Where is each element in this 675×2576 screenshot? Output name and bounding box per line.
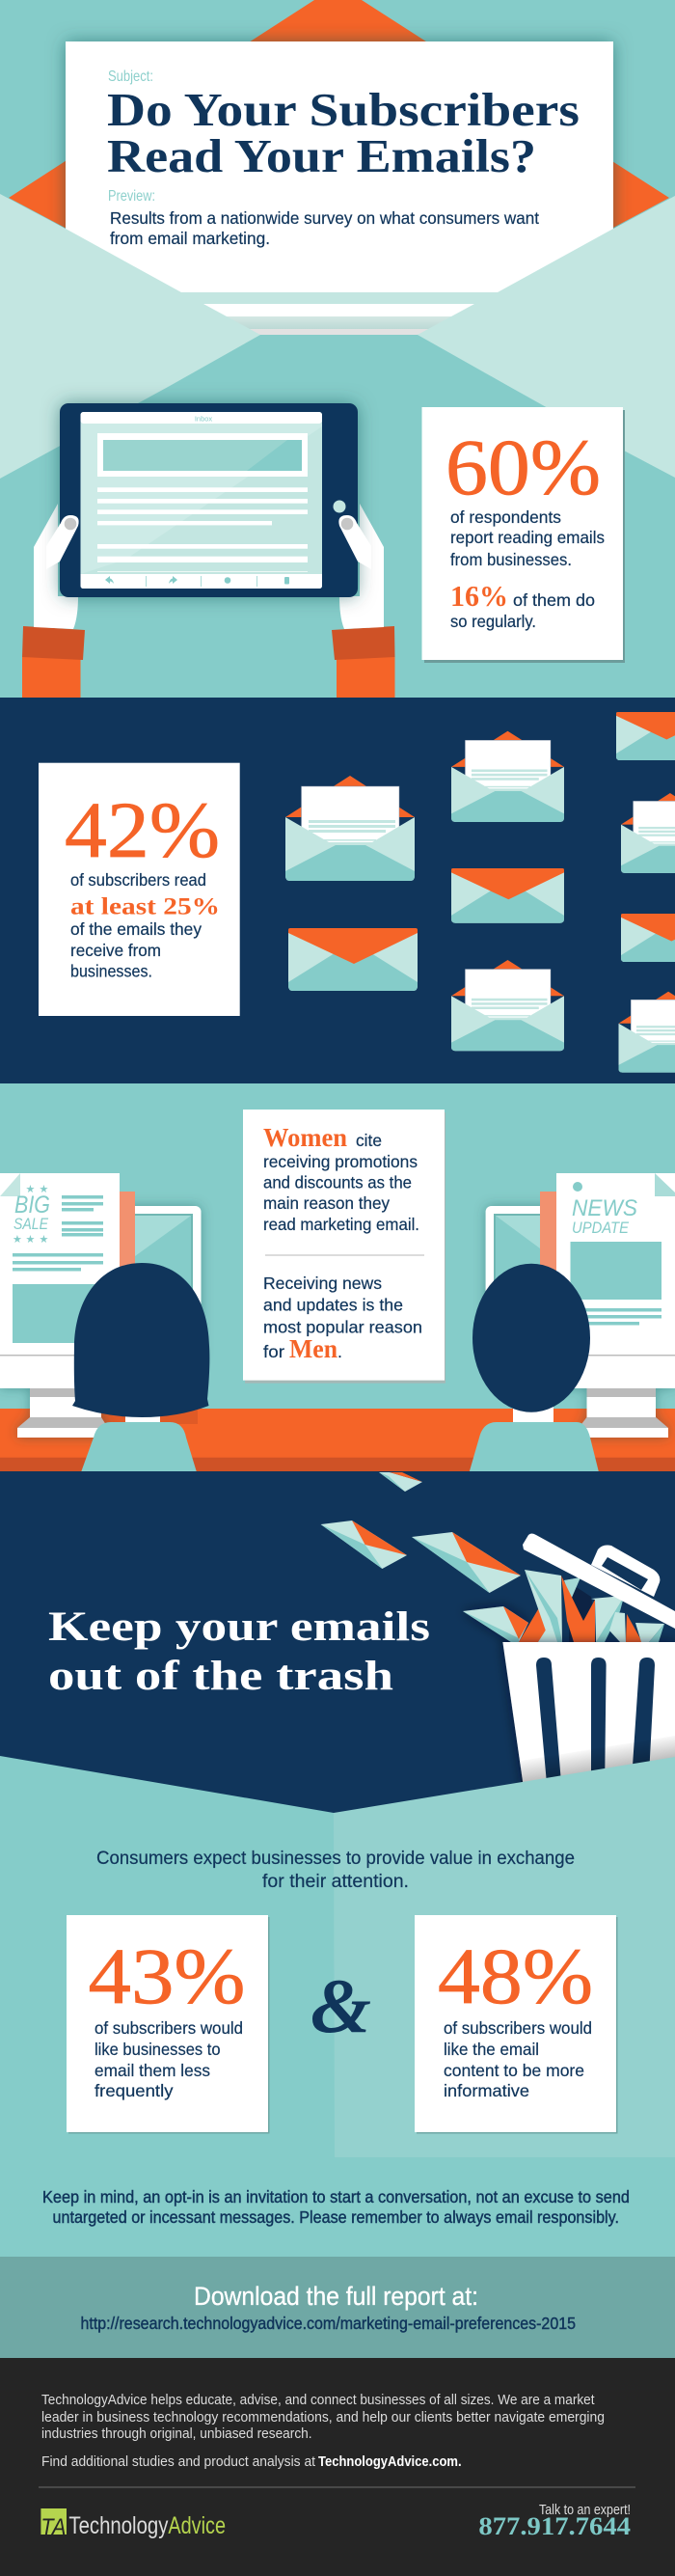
phone number: 877.917.7644 (478, 2512, 631, 2540)
tablet screen (81, 412, 322, 589)
flyer dot (573, 1182, 582, 1192)
panel: 42% section background (0, 698, 675, 1086)
left thumb (46, 515, 79, 569)
about text (41, 2393, 605, 2442)
48% description: of subscribers would (444, 2018, 592, 2038)
download heading: Download the full report at: (194, 2282, 478, 2311)
tablet body (60, 403, 358, 597)
men text: and updates is the (263, 1296, 403, 1315)
left sleeve and cuff (22, 626, 85, 699)
panel: 60% card (422, 407, 625, 663)
preview text: Results from a nationwide survey on what consumers want (110, 208, 539, 228)
women text: main reason they (263, 1193, 390, 1213)
42% description (70, 870, 220, 980)
title (107, 83, 580, 182)
panel: reasons section background (0, 1083, 675, 1472)
women text: and discounts as the (263, 1173, 412, 1192)
43% description: email them less (94, 2061, 210, 2080)
title: Do Your Subscribers (107, 83, 580, 136)
flyer stars (13, 1184, 48, 1246)
further reading text: TechnologyAdvice.com. (318, 2454, 462, 2470)
men text: Men (289, 1334, 338, 1363)
16% description (450, 590, 595, 631)
flyer heading (14, 1192, 50, 1233)
logo: TA (40, 2514, 66, 2540)
flyer heading: UPDATE (572, 1219, 630, 1237)
value intro text: for their attention. (262, 1872, 409, 1892)
logo: Technology (68, 2512, 169, 2539)
closing note (42, 2187, 630, 2227)
flyer stars: ★ (39, 1184, 48, 1195)
panel: download band (0, 2257, 675, 2358)
48% description (444, 2018, 592, 2100)
43% description (94, 2018, 243, 2100)
flyer stars: ★ (25, 1234, 35, 1246)
panel: footer (0, 2358, 675, 2576)
42% description: of subscribers read (70, 870, 206, 890)
flyer heading: BIG (14, 1192, 50, 1219)
43% description: of subscribers would (94, 2018, 243, 2038)
neck (513, 1399, 554, 1424)
hair (72, 1263, 209, 1417)
panel: 48% card (415, 1915, 617, 2134)
title: Read Your Emails? (107, 129, 536, 182)
neck (125, 1409, 160, 1424)
trash can body (502, 1642, 675, 1795)
desk (0, 1409, 675, 1472)
right computer monitor (486, 1206, 675, 1438)
closing note: Keep in mind, an opt-in is an invitation to start a conversation, not an excuse to send (42, 2187, 630, 2206)
value intro text (96, 1849, 575, 1892)
left salmon note (120, 1192, 135, 1278)
women text: cite (356, 1131, 382, 1150)
60% description: of respondents (450, 507, 561, 527)
men text: Receiving news (263, 1274, 382, 1293)
ampersand: & (310, 1964, 371, 2049)
closing note: untargeted or incessant messages. Please remember to always email responsibly. (52, 2207, 619, 2227)
falling envelope 2 (321, 1521, 407, 1569)
falling envelope 1 (379, 1472, 422, 1492)
48% description: like the email (444, 2040, 539, 2059)
men text: for (263, 1342, 284, 1361)
report url: http://research.technologyadvice.com/marketing-email-preferences-2015 (81, 2314, 576, 2333)
flyer image and lines (571, 1242, 662, 1326)
right thumb (338, 515, 371, 569)
16% statistic: 16% (450, 579, 508, 613)
panel: trash section background (0, 1471, 675, 1819)
section heading: out of the trash (48, 1654, 393, 1699)
men text (263, 1274, 422, 1363)
hands behind tablet (34, 504, 384, 629)
further reading text (41, 2454, 462, 2470)
left computer monitor (0, 1206, 201, 1438)
panel: tablet illustration (22, 403, 395, 699)
flyer heading (572, 1195, 637, 1237)
women text: Women (263, 1123, 347, 1152)
right salmon note (540, 1192, 556, 1278)
43% description: frequently (94, 2081, 174, 2100)
48% statistic: 48% (438, 1932, 593, 2020)
flyer stars: ★ (25, 1184, 35, 1195)
women text: read marketing email. (263, 1215, 419, 1234)
email letter sheet (66, 41, 613, 297)
falling envelope 3 (412, 1532, 521, 1593)
envelope back flap (9, 0, 669, 289)
section heading (48, 1604, 430, 1699)
men text: most popular reason (263, 1318, 422, 1337)
about text: industries through original, unbiased research. (41, 2426, 312, 2442)
panel: reasons card (243, 1110, 446, 1384)
head (472, 1264, 590, 1412)
42% statistic: 42% (65, 785, 220, 874)
60% statistic: 60% (446, 423, 601, 511)
envelope slot strips (203, 304, 474, 335)
16% description: so regularly. (450, 612, 536, 631)
tablet screen: Inbox (195, 415, 212, 423)
trash can contents (463, 1570, 664, 1642)
43% statistic: 43% (89, 1932, 246, 2020)
value intro text: Consumers expect businesses to provide value in exchange (96, 1849, 575, 1869)
subject label: Subject: (108, 69, 153, 85)
men text: . (338, 1342, 342, 1361)
panel: 42% card (39, 763, 240, 1016)
tablet toolbar icons (105, 576, 289, 587)
panel: value section background (0, 1756, 675, 2258)
48% description: content to be more (444, 2061, 584, 2080)
60% description: report reading emails (450, 528, 605, 547)
panel: 43% card (67, 1915, 270, 2134)
falling envelopes (321, 1472, 521, 1593)
flyer heading: NEWS (572, 1195, 637, 1221)
42% description: businesses. (70, 961, 152, 980)
preview label: Preview: (108, 188, 155, 205)
logo (40, 2508, 226, 2540)
women text (263, 1123, 419, 1234)
preview text (110, 208, 539, 248)
48% description: informative (444, 2081, 529, 2100)
left sale flyer (0, 1173, 120, 1357)
logo: Advice (168, 2512, 226, 2539)
man from behind (470, 1264, 599, 1472)
42% description: at least 25% (70, 893, 220, 920)
flyer stars: ★ (13, 1234, 22, 1246)
shoulders (81, 1422, 197, 1472)
section heading: Keep your emails (48, 1604, 430, 1650)
panel: hero open envelope (0, 0, 675, 699)
tablet home button (334, 500, 345, 513)
preview text: from email marketing. (110, 229, 270, 248)
flyer lines (13, 1195, 103, 1343)
trash can lid (523, 1534, 675, 1629)
16% description: of them do (513, 590, 595, 610)
42% description: receive from (70, 941, 161, 960)
flyer stars: ★ (39, 1234, 48, 1246)
flyer heading: SALE (14, 1216, 49, 1233)
right sleeve and cuff (332, 626, 395, 699)
envelopes grid (285, 712, 675, 1073)
60% description: from businesses. (450, 550, 572, 569)
woman from behind (72, 1263, 209, 1472)
right news flyer (556, 1173, 675, 1357)
shoulders (470, 1422, 599, 1472)
talk to an expert: Talk to an expert! (539, 2503, 631, 2518)
43% description: like businesses to (94, 2040, 221, 2059)
further reading text: Find additional studies and product analysis at (41, 2454, 315, 2470)
60% description (450, 507, 605, 569)
women text: receiving promotions (263, 1152, 418, 1171)
about text: leader in business technology recommendations, and help our clients better navigate emerging (41, 2410, 605, 2425)
42% description: of the emails they (70, 919, 202, 939)
envelope front flaps (0, 194, 675, 479)
about text: TechnologyAdvice helps educate, advise, and connect businesses of all sizes. We are a market (41, 2393, 594, 2408)
